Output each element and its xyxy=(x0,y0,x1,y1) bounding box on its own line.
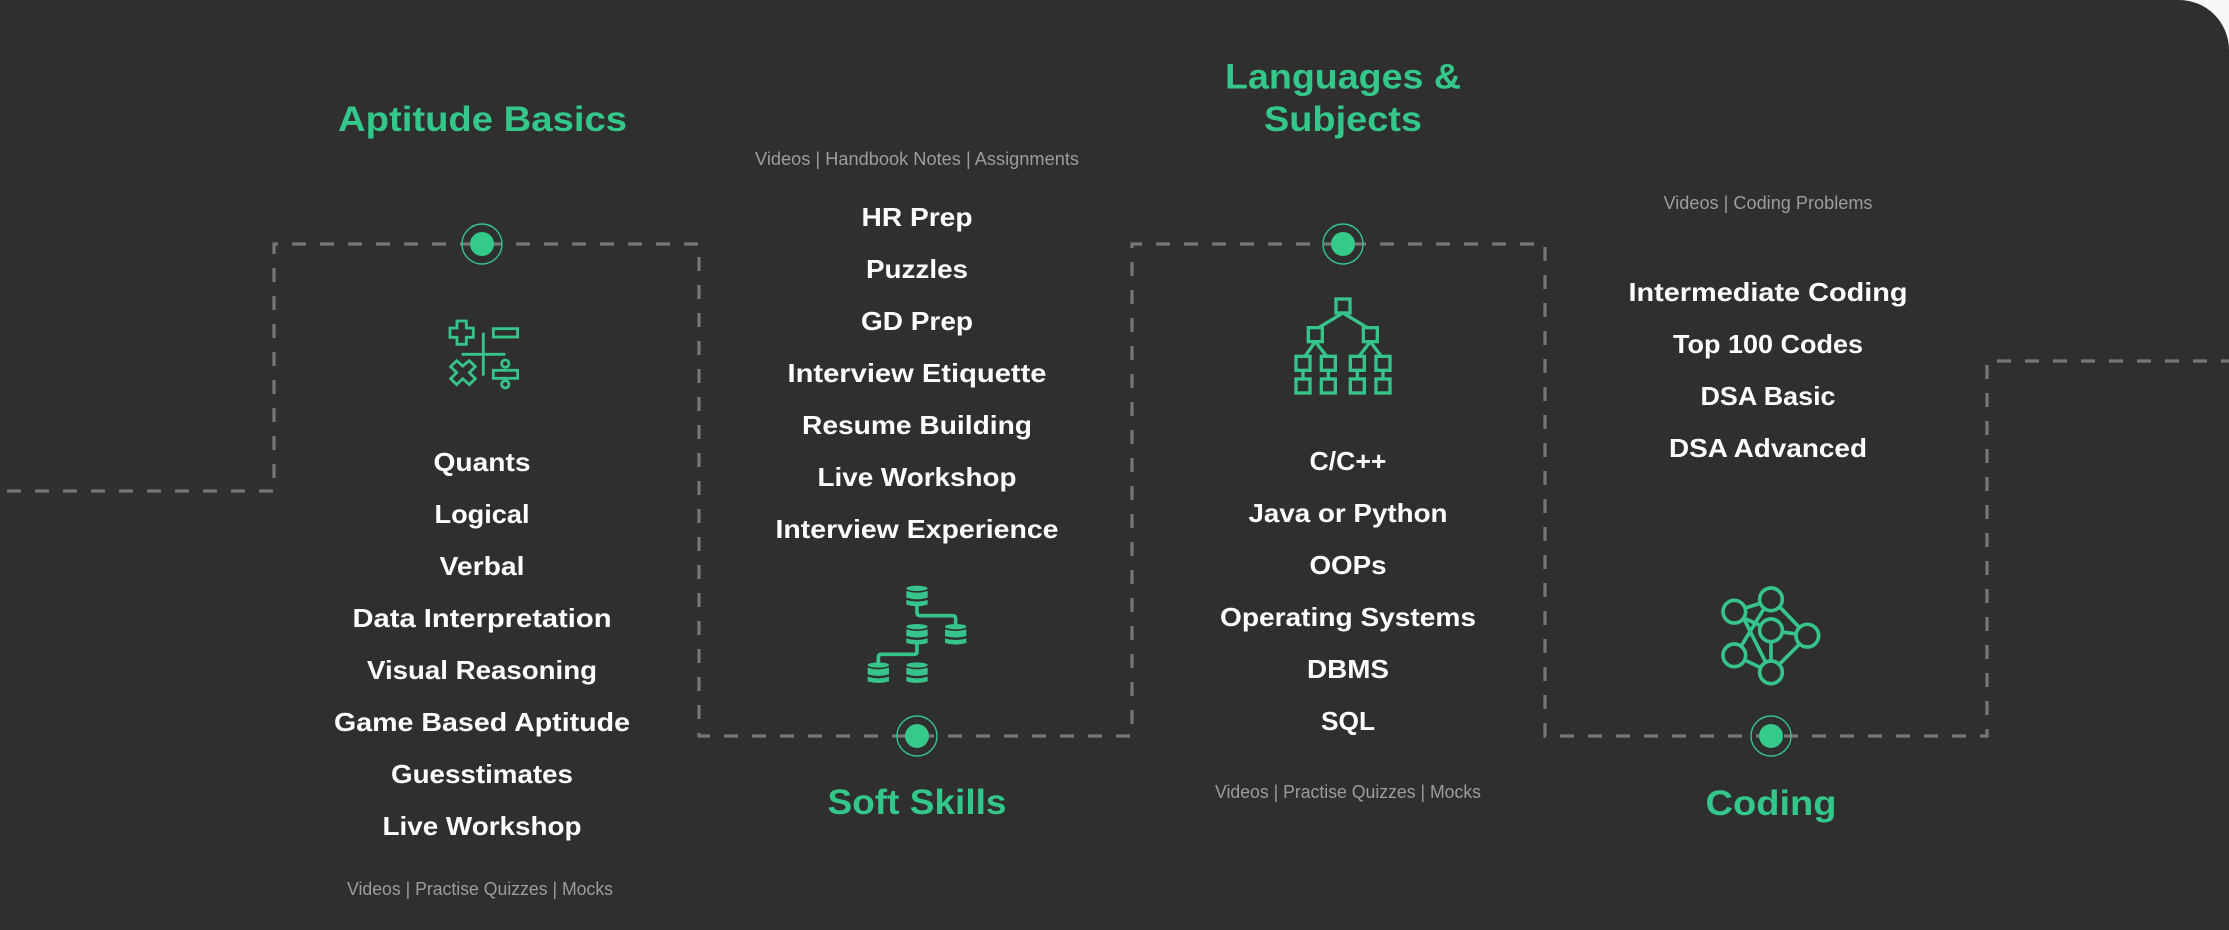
heading: Soft Skills: Soft Skills xyxy=(828,783,1006,822)
node marker xyxy=(897,716,937,756)
list: soft skills topics xyxy=(776,202,1058,544)
list: coding topics: Top 100 Codes xyxy=(1673,329,1863,359)
note: coding resources: Videos | Coding Problems xyxy=(1664,193,1872,213)
list: languages and subjects topics: Java or Python xyxy=(1248,498,1448,528)
note: languages resources: Videos | Practise Quizzes | Mocks xyxy=(1215,782,1481,802)
list: aptitude topics: Live Workshop xyxy=(382,811,582,841)
panel: Languages and Subjects xyxy=(1215,58,1481,802)
list: soft skills topics: Resume Building xyxy=(802,410,1032,440)
note: soft skills resources: Videos | Handbook Notes | Assignments xyxy=(755,149,1079,169)
node marker xyxy=(1323,224,1363,264)
note: aptitude resources: Videos | Practise Quizzes | Mocks xyxy=(347,879,613,899)
heading: Languages and Subjects: Languages & xyxy=(1225,58,1461,96)
list: coding topics: DSA Advanced xyxy=(1669,433,1867,463)
list: aptitude topics: Data Interpretation xyxy=(352,603,612,633)
icon: database tree xyxy=(868,586,966,683)
list: languages and subjects topics: OOPs xyxy=(1310,550,1386,580)
list: coding topics xyxy=(1628,277,1908,463)
list: coding topics: Intermediate Coding xyxy=(1628,277,1908,307)
icon: neural network xyxy=(1723,588,1819,684)
list: soft skills topics: HR Prep xyxy=(862,202,972,232)
heading: Languages and Subjects: Subjects xyxy=(1264,100,1422,139)
list: aptitude topics: Verbal xyxy=(440,551,524,581)
list: aptitude topics: Logical xyxy=(434,499,530,529)
list: aptitude topics: Game Based Aptitude xyxy=(334,707,630,737)
list: languages and subjects topics xyxy=(1220,446,1476,736)
heading: Languages and Subjects xyxy=(1225,58,1461,139)
list: languages and subjects topics: C/C++ xyxy=(1310,446,1386,476)
list: languages and subjects topics: DBMS xyxy=(1307,654,1389,684)
list: soft skills topics: Interview Experience xyxy=(776,514,1058,544)
icon: hierarchy tree xyxy=(1296,299,1390,393)
list: aptitude topics: Guesstimates xyxy=(391,759,573,789)
heading: Aptitude Basics: Aptitude Basics xyxy=(338,100,627,139)
panel: Coding xyxy=(1628,193,1908,823)
icon: maths operators xyxy=(450,321,518,388)
node marker xyxy=(1751,716,1791,756)
list: aptitude topics: Visual Reasoning xyxy=(367,655,597,685)
panel: Soft Skills xyxy=(755,149,1079,822)
list: soft skills topics: Live Workshop xyxy=(818,462,1016,492)
heading: Coding: Coding xyxy=(1706,784,1836,823)
node marker xyxy=(462,224,502,264)
list: languages and subjects topics: Operating Systems xyxy=(1220,602,1476,632)
list: coding topics: DSA Basic xyxy=(1700,381,1836,411)
list: soft skills topics: Interview Etiquette xyxy=(788,358,1046,388)
list: soft skills topics: Puzzles xyxy=(866,254,968,284)
list: languages and subjects topics: SQL xyxy=(1321,706,1375,736)
panel: Aptitude Basics xyxy=(334,100,630,899)
dashed connector path xyxy=(7,244,2229,736)
list: aptitude topics: Quants xyxy=(434,447,530,477)
list: soft skills topics: GD Prep xyxy=(861,306,973,336)
list: aptitude topics xyxy=(334,447,630,841)
